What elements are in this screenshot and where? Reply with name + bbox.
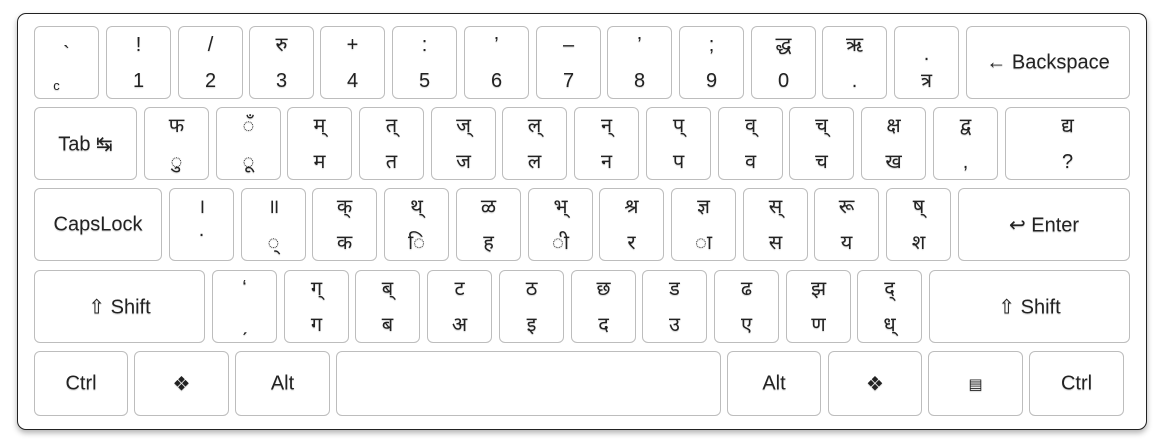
text: ु [171,151,182,173]
text: CapsLock [54,213,142,235]
text: . [924,43,929,65]
text: श्र [624,196,639,218]
text: ज् [456,115,471,137]
text: ब् [382,278,393,300]
text: ट [454,278,465,300]
text: c [53,78,60,93]
text: ध् [883,314,896,336]
text: ʻ [242,278,247,300]
text: Ctrl [1061,372,1092,394]
text: द्ध [776,34,791,56]
text: – [563,34,574,56]
text: ↩ Enter [1009,214,1079,236]
text: Alt [762,372,786,394]
text: व् [745,115,756,137]
text: / [208,34,213,56]
text: 5 [419,70,430,92]
text: ⇧ Shift [88,296,151,318]
text: क्ष [886,115,901,137]
text: + [347,34,358,56]
text: ू [243,151,254,173]
text: ि [408,232,425,254]
text: त [386,151,397,173]
text: त्र [921,70,932,92]
text: छ [596,278,611,300]
text: 8 [634,70,645,92]
text: म् [314,115,325,137]
text: । [198,196,205,218]
text: 3 [276,70,287,92]
text: थ् [410,196,423,218]
text: ज्ञ [697,196,710,218]
text: ज [456,151,471,173]
text: ← Backspace [986,51,1110,73]
text: रु [276,34,287,56]
text: ी [552,232,569,254]
text: ❖ [173,373,190,395]
text: त् [386,115,397,137]
text: अ [452,314,467,336]
text: न् [601,115,612,137]
text: 1 [133,70,144,92]
text: ड [669,278,680,300]
text: ् [268,232,279,254]
text: ▤ [968,376,983,392]
text: 6 [491,70,502,92]
text: ⇧ Shift [998,296,1061,318]
text: ग् [311,278,322,300]
text: ब [382,314,393,336]
text: प [673,151,684,173]
text: ❖ [866,373,884,395]
text: Ctrl [65,372,97,394]
text: झ [811,278,826,300]
text: ’ [494,34,499,56]
text: ख [885,151,902,173]
text: 2 [205,70,216,92]
text: , [963,151,968,173]
text: क [337,232,352,254]
text: न [601,151,612,173]
text: ष् [913,196,924,218]
text: ण [811,314,826,336]
text: रू [839,196,854,218]
text: स् [769,196,782,218]
text: ँ [243,115,254,137]
text: ढ [741,278,752,300]
text: : [422,34,427,56]
text: स [769,232,782,254]
text: 0 [778,70,789,92]
text: फ [169,115,184,137]
row 1 keys [34,26,1130,99]
text: 4 [347,70,358,92]
text: द्य [1061,115,1074,137]
text: . [852,70,857,92]
text: क् [337,196,352,218]
row 5 keys [34,351,1124,416]
row 3 keys [34,188,1130,261]
text: ए [741,314,752,336]
text: 7 [563,70,574,92]
text: द [598,314,609,336]
text: ठ [526,278,537,300]
text: ` [63,43,70,65]
text: ा [695,232,712,254]
text: Alt [271,372,294,394]
text: ऋ [846,34,863,56]
text: श [912,232,925,254]
text: ; [709,34,714,56]
text: ल् [528,115,541,137]
row 2 keys [34,107,1130,180]
text: ? [1062,151,1073,173]
row 4 keys [34,270,1130,343]
text: द् [884,278,895,300]
text: ळ [481,196,496,218]
text: र [627,232,636,254]
text: प् [673,115,684,137]
text: उ [669,314,680,336]
text: य [841,232,852,254]
text: इ [527,314,536,336]
text: ! [136,34,141,56]
text: च [815,151,828,173]
text: 9 [706,70,717,92]
text: व [745,151,756,173]
text: ’ [637,34,642,56]
text: ल [528,151,541,173]
text: म [314,151,325,173]
text: ग [311,314,322,336]
text: ॥ [268,196,279,218]
text: भ् [553,196,568,218]
text: . [199,219,204,241]
text: Tab ↹ [58,133,113,155]
text: ˏ [241,314,248,336]
text: द्व [960,115,971,137]
text: च् [815,115,828,137]
text: ह [483,232,494,254]
